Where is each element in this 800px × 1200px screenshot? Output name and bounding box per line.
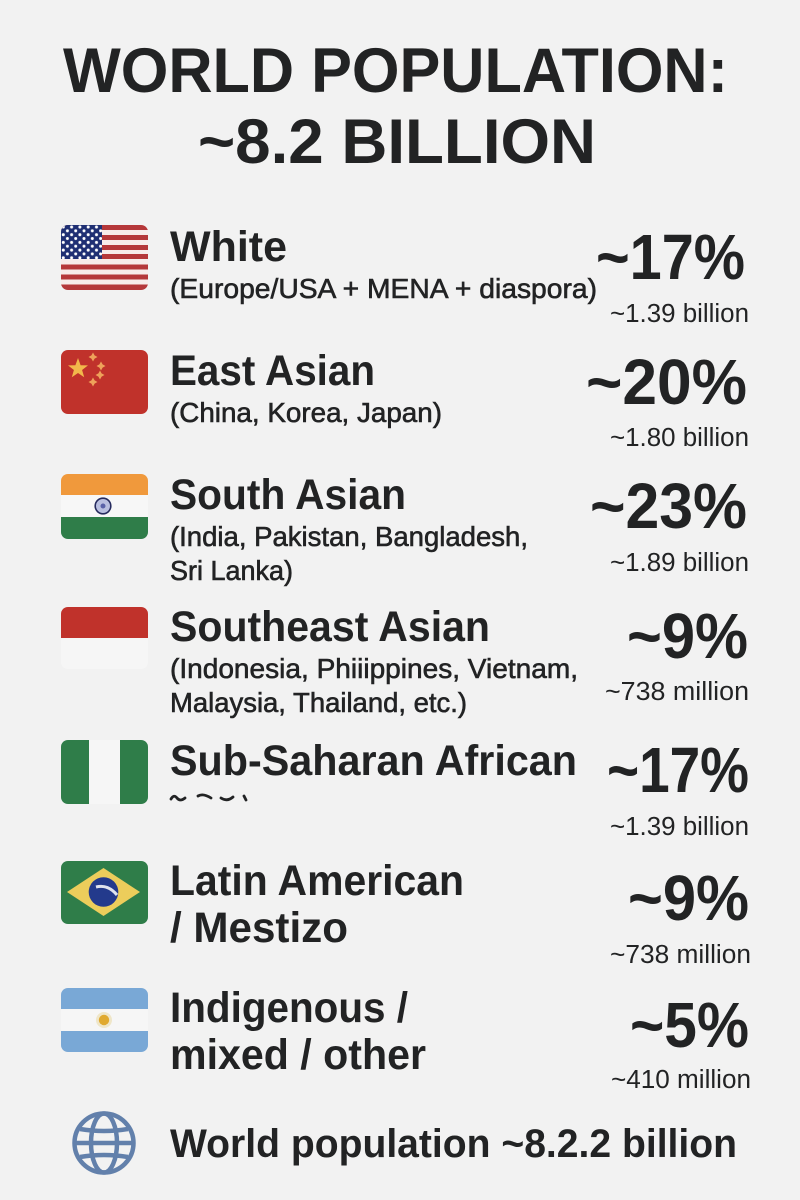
sublabel: Southeast Asian regions — [170, 653, 578, 718]
sublabel: South Asian regions: (India, Pakistan, Bangladesh, — [170, 521, 528, 552]
row: Latin American / Mestizo — [61, 857, 751, 969]
sublabel: White regions: (Europe/USA + MENA + diaspora) — [170, 273, 597, 304]
row: South Asian — [61, 470, 749, 586]
percentage: Indigenous: ~5% — [630, 989, 749, 1061]
percentage: South Asian: ~23% — [590, 470, 747, 542]
row: Southeast Asian — [61, 600, 749, 718]
row: Sub-Saharan African — [61, 740, 748, 836]
sublabel: East Asian regions: (China, Korea, Japan) — [170, 397, 442, 428]
icon: India flag — [61, 474, 148, 539]
icon: globe — [74, 1114, 134, 1172]
total text: World population ~8.2.2 billion — [170, 1122, 737, 1166]
label: White: White — [170, 223, 287, 271]
row: White — [61, 221, 749, 328]
footer: world total — [74, 1114, 737, 1172]
count: White: ~1.39 billion — [610, 300, 749, 328]
row: East Asian — [61, 346, 749, 452]
row: Indigenous / mixed / other — [61, 984, 751, 1094]
label: East Asian: East Asian — [170, 347, 375, 395]
icon: Brazil flag — [61, 861, 148, 924]
icon: Nigeria flag — [61, 740, 148, 804]
label: Indigenous / mixed / other — [170, 984, 426, 1079]
icon: Argentina flag — [61, 988, 148, 1052]
sublabel: Southeast Asian regions: Malaysia, Thailand, etc.) — [170, 687, 467, 718]
clipped sublabel fragment — [171, 795, 246, 800]
title: WORLD POPULATION: — [63, 36, 728, 106]
label: Indigenous / mixed / other: mixed / other — [170, 1031, 426, 1079]
count: South Asian: ~1.89 billion — [610, 549, 749, 577]
sublabel: South Asian regions — [170, 521, 528, 586]
label: Sub-Saharan African: Sub-Saharan African — [170, 737, 577, 785]
icon: USA flag — [61, 225, 148, 290]
label: Latin American / Mestizo: Latin American — [170, 857, 464, 905]
label: Southeast Asian: Southeast Asian — [170, 603, 490, 651]
sublabel: South Asian regions: Sri Lanka) — [170, 555, 293, 586]
percentage: White: ~17% — [596, 221, 745, 293]
label: South Asian: South Asian — [170, 471, 406, 519]
label: Latin American / Mestizo — [170, 857, 464, 952]
title — [63, 36, 728, 177]
count: Southeast Asian: ~738 million — [605, 678, 749, 706]
title: ~8.2 BILLION — [198, 107, 596, 177]
count: Indigenous: ~410 million — [611, 1066, 751, 1094]
count: East Asian: ~1.80 billion — [610, 424, 749, 452]
percentage: East Asian: ~20% — [586, 346, 747, 418]
percentage: Southeast Asian: ~9% — [627, 600, 748, 672]
count: Latin American: ~738 million — [610, 941, 751, 969]
label: Latin American / Mestizo: / Mestizo — [170, 904, 348, 952]
sublabel: Southeast Asian regions: (Indonesia, Phiiippines, Vietnam, — [170, 653, 578, 684]
icon: Indonesia flag — [61, 607, 148, 638]
percentage: Latin American: ~9% — [628, 862, 749, 934]
icon: China flag — [61, 350, 148, 414]
count: Sub-Saharan African: ~1.39 billion — [610, 813, 749, 841]
label: Indigenous / mixed / other: Indigenous / — [170, 984, 408, 1032]
percentage: Sub-Saharan African: ~17% — [607, 734, 749, 806]
